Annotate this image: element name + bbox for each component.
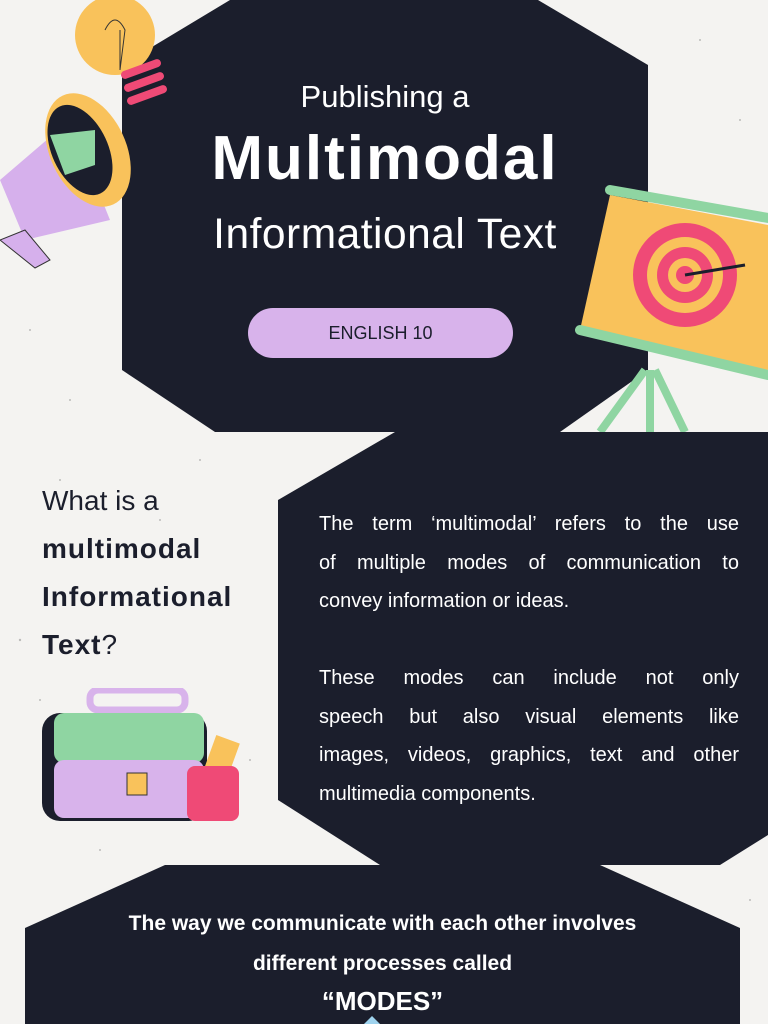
title: Multimodal: [211, 124, 559, 193]
text block: definition: images, videos, graphics, text and other: [319, 744, 739, 766]
heading: what is a multimodal informational text: [42, 485, 232, 660]
icon: small arrow triangle: [364, 1016, 380, 1024]
icon: light bulb: [75, 0, 167, 105]
heading: what is a multimodal informational text: multimodal: [42, 533, 201, 564]
text block: definition: convey information or ideas.: [319, 590, 569, 612]
panel: title octagon: [122, 0, 648, 432]
text block: modes intro: different processes called: [253, 952, 512, 975]
text block: definition: These modes can include not only: [319, 667, 739, 689]
badge: english 10: [248, 308, 513, 358]
badge: english 10: ENGLISH 10: [328, 323, 433, 343]
text block: definition: The term ‘multimodal’ refers to the use: [319, 513, 739, 535]
title: [211, 79, 559, 258]
text block: modes intro: [128, 912, 636, 1016]
heading: what is a multimodal informational text: What is a: [42, 485, 159, 516]
panel: modes octagon: [25, 865, 740, 1024]
text block: modes intro: “MODES”: [322, 986, 443, 1016]
text block: definition: multimedia components.: [319, 782, 536, 804]
text block: definition: of multiple modes of communication to: [319, 552, 739, 574]
icon: megaphone: [0, 93, 131, 269]
icon: bag and wallet: [42, 688, 240, 821]
text block: modes intro: The way we communicate with each other involves: [129, 912, 636, 935]
heading: what is a multimodal informational text: Text?: [42, 629, 117, 660]
title: Publishing a: [301, 79, 469, 114]
text block: definition: speech but also visual elements like: [319, 706, 739, 728]
panel: definition octagon: [278, 432, 768, 865]
text block: definition: [319, 513, 739, 804]
heading: what is a multimodal informational text: Informational: [42, 581, 232, 612]
icon: target board: [575, 185, 768, 432]
title: Informational Text: [213, 211, 557, 258]
